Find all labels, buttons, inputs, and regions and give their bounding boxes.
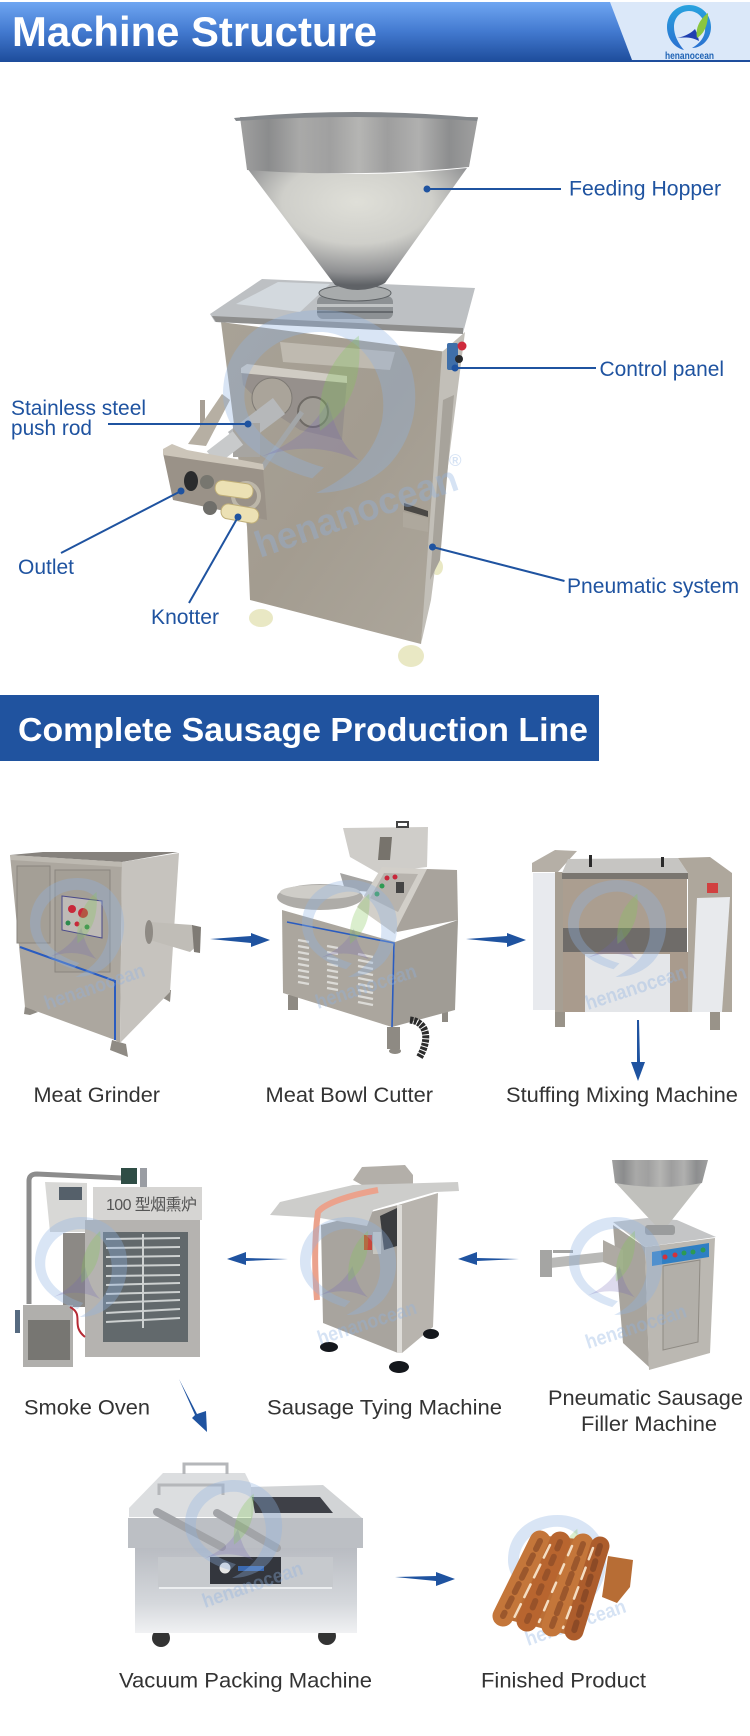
mixer right column xyxy=(678,857,732,1012)
label: Finished Product: Finished Product xyxy=(481,1668,646,1692)
callout: Control panel: Control panel xyxy=(600,357,724,381)
filler control strip xyxy=(652,1243,709,1266)
cutter upper housing xyxy=(378,869,458,932)
oven cavity xyxy=(63,1233,87,1307)
oven rack xyxy=(103,1232,188,1342)
arrow: grinder to cutter xyxy=(210,933,270,947)
filler cabinet left face xyxy=(613,1225,649,1367)
vacuum lower body xyxy=(135,1548,357,1633)
oven pipe xyxy=(29,1174,122,1304)
vacuum handles xyxy=(159,1464,227,1495)
arrow: tying machine to oven xyxy=(227,1252,288,1265)
watermark logo xyxy=(223,310,415,493)
hopper rim xyxy=(234,112,478,121)
sausage chain xyxy=(315,1190,378,1300)
cutter base right xyxy=(392,920,458,1027)
filler extruder xyxy=(540,1240,623,1277)
grinder outlet tube xyxy=(145,920,201,953)
oven wiring xyxy=(70,1307,85,1337)
oven motor xyxy=(121,1168,137,1184)
callout: Stainless steel push rod: push rod xyxy=(11,416,92,440)
knotter rollers xyxy=(214,479,260,524)
machine: sausage tying machine xyxy=(270,1165,459,1373)
arrow: filler to tying machine xyxy=(458,1252,519,1265)
oven control box xyxy=(45,1182,87,1232)
vacuum wheels xyxy=(152,1627,336,1647)
arrow: cutter to mixer xyxy=(466,933,526,947)
watermark: registered mark: ® xyxy=(449,451,462,470)
filler door xyxy=(663,1260,700,1350)
neck collar xyxy=(317,285,393,319)
label: Pneumatic Sausage Filler Machine: Pneumatic Sausage xyxy=(548,1386,743,1410)
arrow: mixer down to filler xyxy=(631,1020,645,1081)
stainless barrels and rods xyxy=(188,378,328,468)
cabinet top plate xyxy=(210,279,475,333)
machine: sausage tying machine: henanocean xyxy=(315,1297,420,1350)
grinder feet xyxy=(24,990,171,1057)
machine: meat grinder: henanocean xyxy=(41,960,148,1015)
cutter vents xyxy=(298,940,373,1005)
header banner: Machine Structure xyxy=(0,2,750,62)
cabinet left face xyxy=(221,322,447,644)
callout: Pneumatic system xyxy=(429,544,739,598)
tying machine table xyxy=(270,1182,459,1226)
watermark: henanocean: henanocean xyxy=(249,458,463,566)
tying machine head box xyxy=(353,1165,413,1195)
vacuum right chamber xyxy=(251,1485,362,1518)
vacuum control panel xyxy=(210,1557,281,1584)
heading banner: Complete Sausage Production Line: Complete Sausage Production Line xyxy=(18,712,588,749)
machine: stuffing mixing machine xyxy=(532,850,732,1030)
hopper cone xyxy=(247,168,467,290)
callout: Stainless steel push rod xyxy=(11,396,252,440)
cutter blade shaft xyxy=(340,873,373,892)
callout: Control panel xyxy=(452,357,724,381)
grinder front face xyxy=(10,855,122,1043)
photo: finished vacuum-packed sausage xyxy=(497,1535,633,1637)
machine: meat bowl cutter: henanocean xyxy=(313,960,419,1014)
oven door frame xyxy=(85,1220,200,1357)
machine: pneumatic sausage filler: henanocean xyxy=(583,1300,689,1354)
mixer trough xyxy=(562,873,688,952)
callout: Outlet xyxy=(18,488,184,579)
heading banner: Complete Sausage Production Line xyxy=(0,695,599,761)
filler top plate xyxy=(613,1218,716,1247)
mixer legs xyxy=(555,1010,720,1030)
control buttons xyxy=(447,342,466,370)
vacuum hinge arms xyxy=(157,1512,277,1548)
tying machine left face xyxy=(321,1205,398,1353)
callout: Outlet: Outlet xyxy=(18,555,74,579)
filler cabinet front face xyxy=(645,1238,715,1370)
label: Stuffing Mixing Machine: Stuffing Mixing Machine xyxy=(506,1083,738,1107)
grinder right face xyxy=(120,853,179,1043)
side pack xyxy=(602,1556,633,1603)
cutter control panel xyxy=(357,867,427,934)
extruder mounting block xyxy=(241,364,347,440)
filler collar xyxy=(645,1225,675,1235)
vacuum upper shelf xyxy=(128,1518,363,1548)
cutter power cable xyxy=(410,1020,426,1058)
pack backing xyxy=(497,1535,608,1637)
cutter bowl xyxy=(277,884,363,910)
callout: Stainless steel push rod: Stainless steel xyxy=(11,396,146,420)
label: Vacuum Packing Machine: Vacuum Packing Machine xyxy=(119,1668,372,1692)
mixer front plate xyxy=(585,954,670,1012)
machine: pneumatic sausage filler xyxy=(540,1160,716,1370)
tying machine feet xyxy=(320,1329,439,1373)
label: Smoke Oven: Smoke Oven xyxy=(24,1396,150,1420)
cutter legs xyxy=(288,995,448,1054)
cutter lid xyxy=(343,822,428,873)
air regulators xyxy=(364,1232,381,1254)
machine: vacuum packing machine xyxy=(128,1464,363,1647)
machine: meat grinder xyxy=(10,852,201,1057)
door latch xyxy=(403,503,428,532)
filler hopper cone xyxy=(615,1182,702,1225)
mixer left column xyxy=(532,850,577,1012)
label: Pneumatic Sausage Filler Machine: Filler Machine xyxy=(581,1412,717,1436)
oven Chinese label: 100 型烟熏炉 xyxy=(106,1196,197,1214)
vacuum lid xyxy=(129,1473,251,1517)
heading: Machine Structure: Machine Structure xyxy=(12,8,377,55)
filler hopper cylinder xyxy=(612,1160,708,1187)
logo: henanocean xyxy=(665,5,714,62)
hopper cylinder xyxy=(240,117,478,173)
machine feet xyxy=(249,559,443,667)
sausage rows xyxy=(503,1541,600,1631)
callout: Knotter: Knotter xyxy=(151,605,219,629)
oven side box xyxy=(15,1305,73,1367)
label: Pneumatic Sausage Filler Machine xyxy=(548,1386,743,1436)
product photo: sausage filler machine structure xyxy=(163,112,478,667)
grinder control panel xyxy=(62,896,102,938)
machine: meat bowl cutter xyxy=(277,822,458,1058)
machine: vacuum packing machine: henanocean xyxy=(199,1558,306,1613)
label: Sausage Tying Machine: Sausage Tying Machine xyxy=(267,1396,502,1420)
label: Meat Bowl Cutter: Meat Bowl Cutter xyxy=(266,1083,433,1107)
arrow: vacuum packer to product xyxy=(395,1572,455,1586)
watermark text behind product: henanocean xyxy=(522,1596,629,1651)
callout: Feeding Hopper: Feeding Hopper xyxy=(569,176,721,200)
label: Meat Grinder: Meat Grinder xyxy=(34,1083,160,1107)
oven top panel xyxy=(93,1187,202,1220)
watermark logo behind product xyxy=(508,1515,606,1613)
cutter base left xyxy=(282,910,395,1027)
callout: Pneumatic system: Pneumatic system xyxy=(567,574,739,598)
arrow: oven to vacuum packer xyxy=(179,1379,207,1432)
mixer lid xyxy=(562,858,688,873)
grinder top xyxy=(10,852,178,862)
tying machine right face xyxy=(398,1193,438,1353)
cabinet right face xyxy=(421,332,465,644)
machine: stuffing mixing machine: henanocean xyxy=(583,961,689,1015)
mixer lower panel xyxy=(563,952,688,1012)
callout: Feeding Hopper xyxy=(424,176,721,200)
machine: smoke oven xyxy=(15,1168,202,1367)
head plate xyxy=(163,444,267,520)
logo: henanocean: henanocean xyxy=(665,51,714,62)
callout: Knotter xyxy=(151,514,242,629)
